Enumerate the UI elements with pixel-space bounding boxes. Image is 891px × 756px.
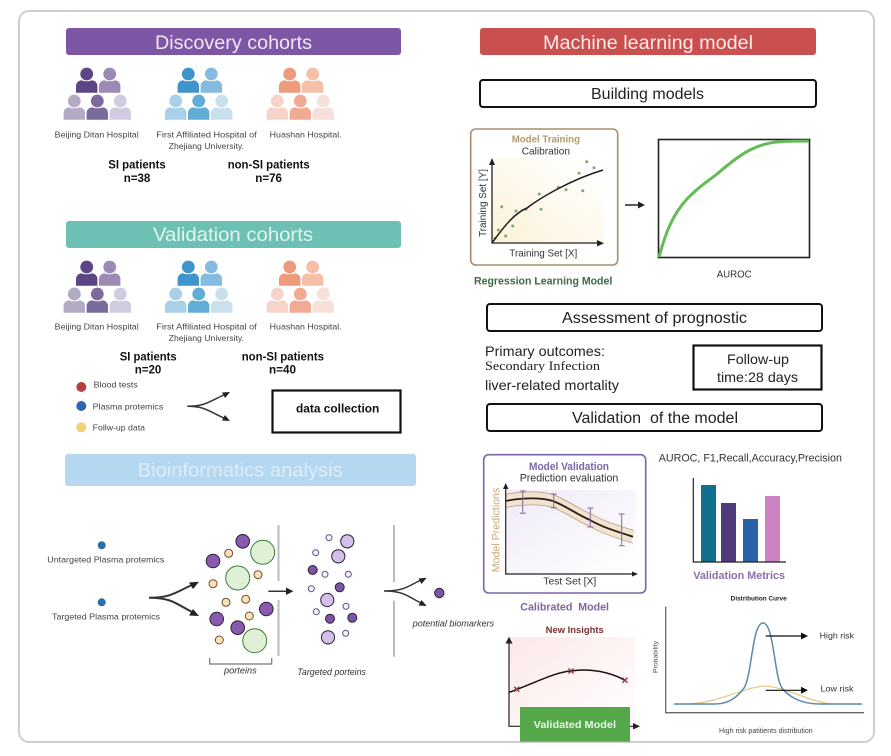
hospital labels <box>55 322 342 343</box>
heading: discovery cohorts <box>66 28 401 55</box>
arrow: to targeted proteins <box>268 588 293 595</box>
chart: model validation: Model Validation <box>529 461 609 473</box>
icon: Huashan people <box>267 261 334 313</box>
heading: machine learning model <box>480 28 816 55</box>
panel: machine learning model <box>471 28 864 742</box>
bracket: proteins <box>210 658 272 675</box>
text: primary outcomes: Primary outcomes: <box>485 343 605 359</box>
heading: discovery cohorts: Discovery cohorts <box>155 32 312 54</box>
source: targeted proteomics: Targeted Plasma protemics <box>52 612 160 622</box>
filter bar two <box>393 525 395 657</box>
label: regression learning model: Regression Learning Model <box>474 276 612 288</box>
potential biomarker <box>412 588 494 629</box>
chart: model training: Model Training <box>512 134 580 146</box>
arrow: fork to biomarkers <box>384 578 427 606</box>
label: calibrated model: Calibrated Model <box>520 602 609 614</box>
icon: Beijing Ditan people <box>64 68 131 120</box>
targeted protein circles <box>308 535 357 644</box>
chart: distribution curve: High risk <box>820 630 855 640</box>
chart: model training: Calibration <box>522 146 570 158</box>
arrow: training to AUROC <box>625 202 645 208</box>
heading: validation cohorts <box>66 221 401 248</box>
arrow: fork to proteins <box>149 582 199 616</box>
icon: Zhejiang people <box>165 261 232 313</box>
chart: model validation <box>484 455 646 593</box>
hospital labels: Beijing Ditan Hospital <box>55 130 139 140</box>
chart: model training <box>471 129 618 265</box>
hospital labels: Zhejiang University. <box>169 333 244 343</box>
SI patient count: n=20 <box>135 363 162 377</box>
hospital labels: First Affiliated Hospital of <box>156 130 257 140</box>
text: primary outcomes: Secondary Infection <box>485 358 601 373</box>
chart: AUROC <box>658 140 810 281</box>
non-SI patient count: non-SI patients <box>242 350 324 364</box>
SI patient count: SI patients <box>120 350 177 364</box>
chart: distribution curve: High risk patitients distribution <box>719 728 813 735</box>
heading: building models: Building models <box>591 86 704 103</box>
bracket: proteins: porteins <box>223 665 257 675</box>
icon: Beijing Ditan people <box>64 261 131 313</box>
hospital labels: Zhejiang University. <box>169 141 244 151</box>
source: untargeted proteomics <box>47 541 164 565</box>
potential biomarker: potential biomarkers <box>412 619 494 629</box>
chart: model validation: Model Predictions <box>490 487 502 572</box>
SI patient count: n=38 <box>124 171 151 185</box>
legend: data types: Blood tests <box>94 380 138 390</box>
heading: bioinformatics analysis: Bioinformatics analysis <box>138 460 343 482</box>
legend: data types: Plasma protemics <box>93 402 163 412</box>
heading: machine learning model: Machine learning model <box>543 32 753 54</box>
chart: model training: Training Set [X] <box>509 248 577 260</box>
non-SI patient count <box>228 158 310 185</box>
chart: new insights: New Insights <box>546 625 604 635</box>
box: validated model <box>520 707 630 742</box>
panel: validation cohorts <box>55 221 401 433</box>
text: primary outcomes: liver-related mortality <box>485 377 619 393</box>
chart: AUROC: AUROC <box>717 270 752 281</box>
heading: assessment of prognostic: Assessment of prognostic <box>562 310 747 327</box>
box: follow-up time: Follow-up <box>727 351 789 367</box>
chart: model validation: Prediction evaluation <box>520 473 618 485</box>
source: targeted proteomics <box>52 598 160 622</box>
box: follow-up time <box>694 346 822 390</box>
heading: building models <box>480 80 816 107</box>
chart: distribution curve: Probability <box>652 640 660 673</box>
chart: model validation: Test Set [X] <box>543 576 596 588</box>
hospital labels <box>55 130 342 151</box>
heading: bioinformatics analysis <box>65 454 416 486</box>
SI patient count <box>120 350 177 377</box>
non-SI patient count <box>242 350 324 377</box>
heading: validation of the model <box>487 404 822 431</box>
legend: data types <box>76 380 163 433</box>
text: metrics list: AUROC, F1,Recall,Accuracy,Precision <box>659 453 842 465</box>
text: primary outcomes <box>485 343 619 393</box>
non-SI patient count: non-SI patients <box>228 158 310 172</box>
chart: distribution curve: Low risk <box>820 684 854 694</box>
hospital labels: Huashan Hospital. <box>270 130 342 140</box>
chart: distribution curve: Distribution Curve <box>731 597 787 603</box>
panel: bioinformatics analysis <box>47 454 494 677</box>
box: validated model: Validated Model <box>534 719 616 731</box>
hospital labels: Beijing Ditan Hospital <box>55 322 139 332</box>
icon: Huashan people <box>267 68 334 120</box>
hospital labels: First Affiliated Hospital of <box>156 322 257 332</box>
filter bar one <box>278 525 280 656</box>
SI patient count <box>108 158 166 185</box>
box: data collection: data collection <box>296 402 379 416</box>
heading: assessment of prognostic <box>487 304 822 331</box>
panel: discovery cohorts <box>55 28 401 185</box>
label: targeted proteins: Targeted porteins <box>297 667 366 677</box>
chart: new insights <box>506 625 640 730</box>
chart: validation metrics bars: Validation Metrics <box>693 570 785 582</box>
protein circles <box>206 534 275 653</box>
source: untargeted proteomics: Untargeted Plasma protemics <box>47 555 164 565</box>
non-SI patient count: n=40 <box>269 363 296 377</box>
non-SI patient count: n=76 <box>255 171 282 185</box>
box: follow-up time: time:28 days <box>717 369 798 385</box>
arrow: fork to data collection <box>187 392 230 421</box>
chart: model training: Training Set [Y] <box>477 169 489 237</box>
chart: distribution curve <box>652 597 864 735</box>
icon: Zhejiang people <box>165 68 232 120</box>
hospital labels: Huashan Hospital. <box>270 322 342 332</box>
SI patient count: SI patients <box>108 158 166 172</box>
legend: data types: Follw-up data <box>93 423 145 433</box>
chart: validation metrics bars <box>693 478 786 582</box>
heading: validation cohorts: Validation cohorts <box>153 224 313 246</box>
heading: validation of the model: Validation of the model <box>572 410 738 427</box>
box: data collection <box>272 390 400 432</box>
